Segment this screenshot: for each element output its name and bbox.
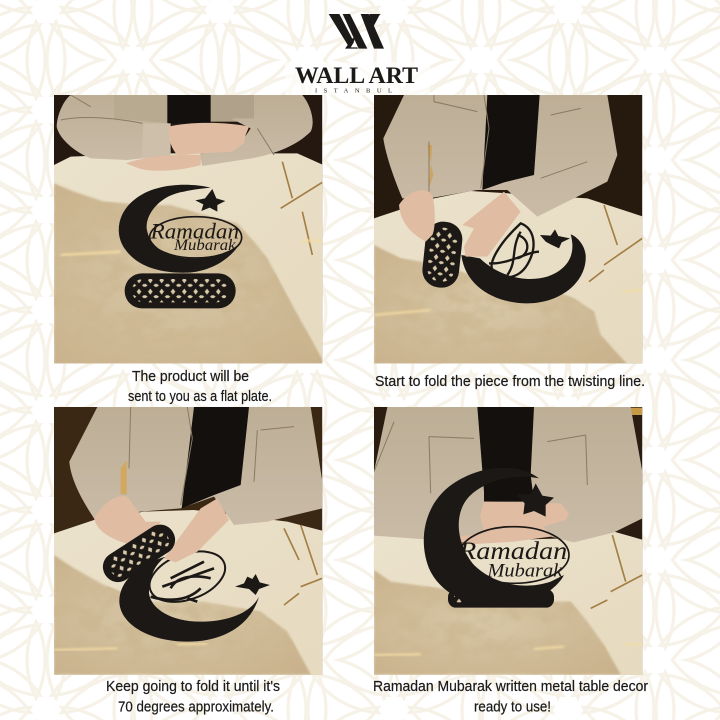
table marble bbox=[54, 510, 323, 675]
caption: step 3: Keep going to fold it until it's bbox=[106, 679, 280, 695]
greeting text: Ramadan bbox=[150, 218, 239, 243]
caption: step 4: ready to use! bbox=[474, 700, 551, 716]
table marble bbox=[54, 153, 323, 364]
crescent decor bbox=[461, 223, 586, 303]
crescent decor bbox=[119, 542, 270, 642]
lattice base plate bbox=[125, 273, 236, 308]
logo wordmark: WALL ART bbox=[295, 63, 418, 88]
greeting text: Ramadan bbox=[458, 537, 567, 565]
hands bbox=[94, 496, 229, 562]
crescent decor bbox=[424, 468, 569, 607]
greeting ring and calligraphy bbox=[149, 550, 226, 603]
caption: step 1 bbox=[128, 369, 272, 405]
star bbox=[235, 574, 270, 595]
greeting ring and calligraphy bbox=[489, 223, 539, 277]
star bbox=[517, 483, 554, 517]
brand logo bbox=[295, 14, 418, 94]
logo backing bbox=[285, 62, 430, 95]
panel: step 4 finished decor photo bbox=[374, 405, 643, 675]
panel: step 1 flat plate photo bbox=[54, 95, 323, 364]
crescent decor: Mubarak bbox=[173, 237, 237, 254]
greeting ring bbox=[459, 527, 569, 583]
table marble bbox=[374, 191, 643, 364]
caption: step 2: Start to fold the piece from the twisting line. bbox=[375, 374, 645, 390]
folding lattice base plate bbox=[422, 222, 462, 288]
hands bbox=[399, 190, 521, 257]
jacket and shirt bbox=[69, 407, 322, 525]
panel: step 2 start folding photo bbox=[374, 95, 643, 364]
table marble bbox=[374, 532, 643, 675]
logo monogram icon bbox=[329, 14, 384, 49]
greeting ring bbox=[150, 217, 242, 258]
star bbox=[540, 229, 570, 248]
crescent decor bbox=[119, 185, 242, 273]
jacket and shirt bbox=[383, 95, 617, 217]
caption: step 3 bbox=[106, 679, 280, 716]
jacket and shirt bbox=[57, 95, 313, 166]
caption: step 1: sent to you as a flat plate. bbox=[128, 389, 272, 405]
folding lattice base plate bbox=[102, 524, 176, 582]
lattice base plate bbox=[448, 584, 554, 608]
hands bbox=[457, 502, 569, 545]
caption: step 4 bbox=[373, 679, 648, 716]
jacket and shirt bbox=[374, 407, 642, 542]
logo subtitle: ISTANBUL bbox=[315, 88, 392, 94]
caption: step 1: The product will be bbox=[132, 369, 249, 385]
star bbox=[195, 189, 225, 212]
hands bbox=[126, 123, 249, 171]
crescent decor: Mubarak bbox=[486, 561, 563, 582]
panel: step 3 keep folding photo bbox=[54, 405, 323, 675]
caption: step 4: Ramadan Mubarak written metal table decor bbox=[373, 679, 648, 695]
caption: step 3: 70 degrees approximately. bbox=[118, 700, 274, 716]
